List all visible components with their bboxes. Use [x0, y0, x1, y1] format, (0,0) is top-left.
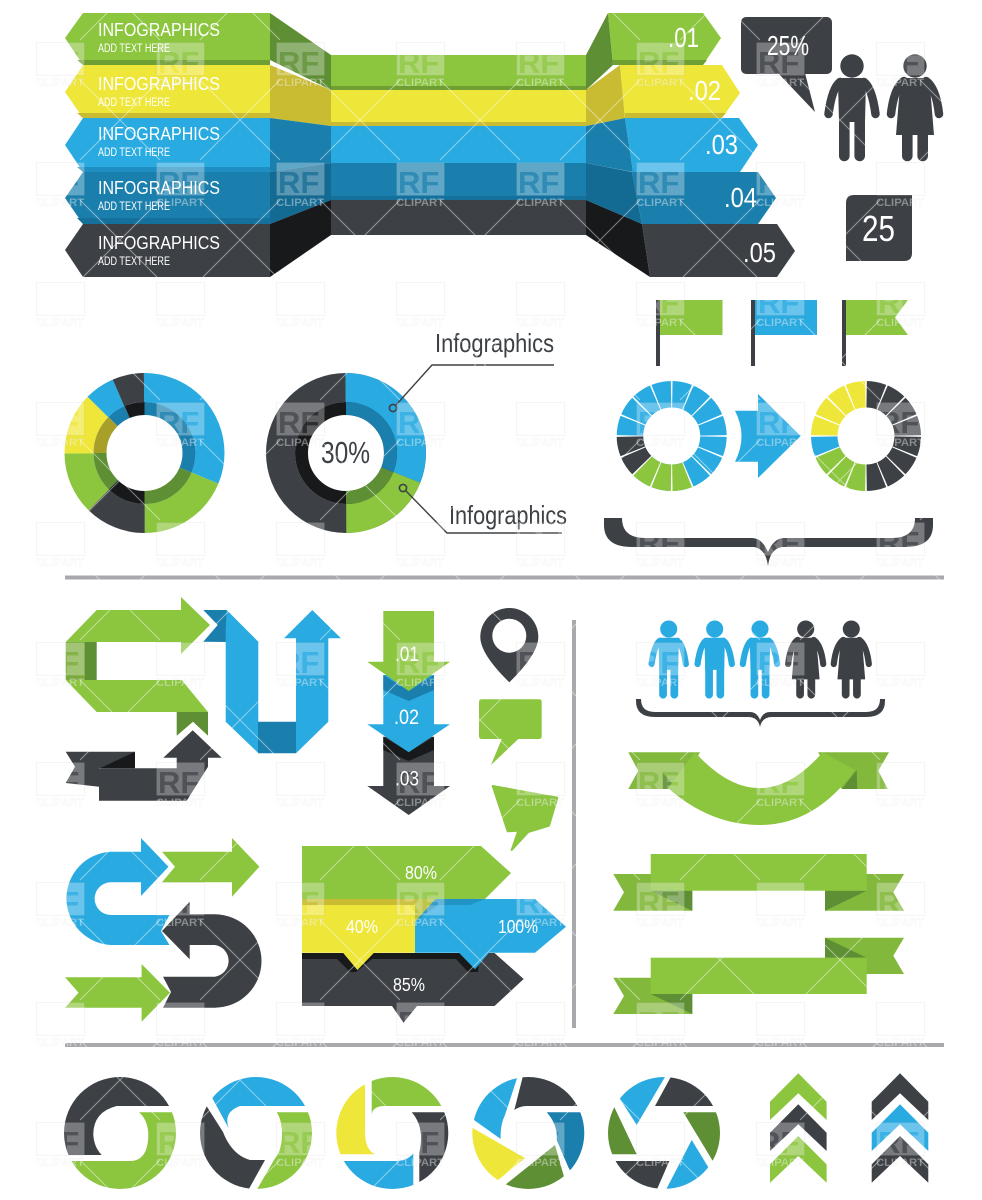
- divider: lower section rule: [65, 1043, 944, 1047]
- arrow: green folded S ribbon: [66, 597, 210, 736]
- watermark overlay: RF: [518, 1125, 559, 1160]
- band labels: INFOGRAPHICS: [98, 177, 220, 198]
- watermark overlay: RF: [758, 885, 799, 920]
- watermark overlay: CLIPART: [276, 197, 324, 209]
- watermark overlay: CLIPART: [876, 1157, 924, 1169]
- watermark overlay: CLIPART: [396, 1037, 444, 1049]
- watermark overlay: RF: [278, 765, 319, 800]
- arrow: stacked downward arrows: .01: [395, 643, 419, 666]
- icon: flat ribbon: [613, 854, 904, 911]
- watermark overlay: CLIPART: [396, 1157, 444, 1169]
- icon: stepped ribbon: [613, 938, 904, 1014]
- watermark overlay: CLIPART: [516, 797, 564, 809]
- watermark overlay: RF: [758, 645, 799, 680]
- panel: folded five-band banner: [65, 13, 795, 277]
- watermark overlay: RF: [638, 1005, 679, 1040]
- watermark overlay: RF: [278, 1125, 319, 1160]
- chart: donut two 30%: 30%: [321, 435, 370, 470]
- band labels: [98, 19, 776, 268]
- icon: five-blade aperture: [472, 1077, 584, 1189]
- watermark overlay: CLIPART: [36, 1037, 84, 1049]
- chart: segmented ring two: [824, 394, 908, 478]
- watermark overlay: RF: [38, 285, 79, 320]
- right ends with folds: [586, 13, 795, 277]
- panel: five people with brace: [636, 620, 885, 727]
- watermark overlay: RF: [518, 765, 559, 800]
- watermark overlay: RF: [878, 405, 919, 440]
- watermark overlay: RF: [278, 645, 319, 680]
- watermark overlay: CLIPART: [876, 557, 924, 569]
- 40% yellow arrow: 40%: [346, 917, 378, 937]
- icon: large brace: [604, 518, 933, 566]
- band 3 blue left: [65, 118, 331, 172]
- watermark overlay: CLIPART: [276, 797, 324, 809]
- watermark overlay: CLIPART: [276, 437, 324, 449]
- band labels: .01: [668, 22, 699, 53]
- watermark overlay: RF: [158, 1005, 199, 1040]
- watermark overlay: RF: [278, 525, 319, 560]
- callout: 25% speech bubble: 25%: [767, 30, 809, 61]
- watermark overlay: CLIPART: [636, 557, 684, 569]
- icon: small brace: [636, 699, 885, 727]
- watermark overlay: CLIPART: [636, 317, 684, 329]
- 80% green arrow: 80%: [405, 863, 437, 883]
- watermark overlay: CLIPART: [276, 557, 324, 569]
- chart: segmented ring one: [630, 394, 713, 478]
- watermark overlay: CLIPART: [156, 317, 204, 329]
- watermark overlay: RF: [518, 45, 559, 80]
- watermark overlay: RF: [38, 405, 79, 440]
- watermark overlay: RF: [158, 885, 199, 920]
- icon: three-piece ring: [200, 1077, 312, 1189]
- watermark overlay: RF: [758, 285, 799, 320]
- watermark overlay: RF: [158, 645, 199, 680]
- watermark overlay: RF: [878, 45, 919, 80]
- watermark overlay: CLIPART: [636, 917, 684, 929]
- watermark overlay: RF: [518, 165, 559, 200]
- watermark overlay: CLIPART: [396, 317, 444, 329]
- watermark overlay: RF: [158, 405, 199, 440]
- band labels: INFOGRAPHICS: [98, 73, 220, 94]
- watermark overlay: CLIPART: [36, 917, 84, 929]
- icon: green speech bubble: [479, 699, 542, 765]
- icon: dark and blue chevrons: [872, 1073, 928, 1183]
- arrow: blue block arrow between rings: [735, 394, 801, 478]
- arrow: blue U-turn arrow: [66, 838, 170, 945]
- 40% yellow arrow: [302, 899, 415, 970]
- watermark overlay: RF: [38, 165, 79, 200]
- watermark overlay: CLIPART: [516, 917, 564, 929]
- icon: green flag: [656, 300, 722, 366]
- divider: vertical rule: [572, 620, 576, 1028]
- arrow: blue folded U ribbon: [203, 610, 341, 753]
- watermark overlay: RF: [158, 525, 199, 560]
- watermark overlay: RF: [398, 45, 439, 80]
- icon: woman dark 2: [834, 620, 869, 695]
- watermark overlay: CLIPART: [876, 437, 924, 449]
- band labels: ADD TEXT HERE: [98, 256, 170, 268]
- watermark overlay: RF: [278, 285, 319, 320]
- watermark overlay: RF: [638, 45, 679, 80]
- watermark overlay: CLIPART: [756, 197, 804, 209]
- watermark overlay: RF: [878, 1005, 919, 1040]
- watermark overlay: CLIPART: [396, 77, 444, 89]
- callout: 25% speech bubble: [741, 17, 832, 112]
- icon: blue flag: [751, 300, 817, 366]
- watermark overlay: RF: [398, 885, 439, 920]
- watermark overlay: CLIPART: [276, 917, 324, 929]
- watermark overlay: RF: [878, 885, 919, 920]
- watermark overlay: RF: [518, 1005, 559, 1040]
- watermark overlay: RF: [758, 765, 799, 800]
- band labels: INFOGRAPHICS: [98, 123, 220, 144]
- watermark overlay: CLIPART: [516, 1157, 564, 1169]
- 85% dark arrow: [302, 953, 524, 1023]
- watermark overlay: CLIPART: [516, 437, 564, 449]
- watermark overlay: CLIPART: [636, 197, 684, 209]
- watermark overlay: CLIPART: [156, 77, 204, 89]
- watermark overlay: RF: [878, 525, 919, 560]
- watermark overlay: RF: [38, 1125, 79, 1160]
- watermark overlay: RF: [398, 1005, 439, 1040]
- arrow: stacked downward arrows: [367, 611, 450, 815]
- band labels: .05: [743, 237, 776, 268]
- watermark overlay: CLIPART: [876, 917, 924, 929]
- watermark overlay: RF: [638, 645, 679, 680]
- watermark overlay: CLIPART: [756, 1157, 804, 1169]
- 85% dark arrow: 85%: [393, 975, 425, 995]
- band labels: INFOGRAPHICS: [98, 19, 220, 40]
- watermark overlay: RF: [758, 165, 799, 200]
- watermark overlay: RF: [638, 285, 679, 320]
- watermark overlay: CLIPART: [756, 677, 804, 689]
- watermark overlay: CLIPART: [636, 677, 684, 689]
- watermark overlay: CLIPART: [36, 1157, 84, 1169]
- watermark overlay: RF: [38, 45, 79, 80]
- watermark overlay: CLIPART: [516, 77, 564, 89]
- band labels: ADD TEXT HERE: [98, 97, 170, 109]
- band labels: ADD TEXT HERE: [98, 201, 170, 213]
- watermark overlay: CLIPART: [276, 77, 324, 89]
- watermark overlay: RF: [398, 285, 439, 320]
- watermark overlay: CLIPART: [156, 1157, 204, 1169]
- 100% blue arrow: 100%: [498, 917, 538, 937]
- watermark overlay: RF: [278, 885, 319, 920]
- watermark overlay: RF: [518, 885, 559, 920]
- watermark overlay: CLIPART: [756, 77, 804, 89]
- watermark overlay: RF: [278, 45, 319, 80]
- band labels: INFOGRAPHICS: [98, 232, 220, 253]
- callout: top Infographics label: Infographics: [435, 328, 554, 358]
- watermark overlay: CLIPART: [276, 1157, 324, 1169]
- watermark overlay: CLIPART: [36, 77, 84, 89]
- watermark overlay: RF: [878, 165, 919, 200]
- band labels: .02: [688, 75, 721, 106]
- watermark overlay: CLIPART: [396, 437, 444, 449]
- icon: four-piece ring: [336, 1077, 448, 1189]
- watermark overlay: RF: [638, 765, 679, 800]
- watermark overlay: CLIPART: [876, 77, 924, 89]
- watermark overlay: CLIPART: [876, 317, 924, 329]
- icon: green and dark chevrons: [770, 1073, 827, 1183]
- chart: percent arrows: [302, 846, 566, 1023]
- watermark overlay: CLIPART: [156, 677, 204, 689]
- watermark overlay: CLIPART: [36, 437, 84, 449]
- watermark overlay: RF: [398, 765, 439, 800]
- watermark overlay: RF: [158, 45, 199, 80]
- watermark overlay: RF: [278, 405, 319, 440]
- callout: top Infographics label: [389, 328, 554, 412]
- icon: man: [828, 54, 876, 156]
- watermark overlay: RF: [638, 405, 679, 440]
- watermark overlay: RF: [758, 1005, 799, 1040]
- watermark overlay: RF: [38, 1005, 79, 1040]
- callout: 25 square badge: [846, 195, 912, 261]
- watermark overlay: CLIPART: [876, 1037, 924, 1049]
- icon: six-blade aperture: [608, 1077, 720, 1189]
- watermark overlay: CLIPART: [276, 317, 324, 329]
- chart: donut two 30%: [280, 388, 412, 518]
- watermark overlay: RF: [278, 165, 319, 200]
- watermark overlay: RF: [158, 765, 199, 800]
- icon: person blue 1: [652, 620, 686, 695]
- watermark overlay: CLIPART: [36, 317, 84, 329]
- band labels: ADD TEXT HERE: [98, 147, 170, 159]
- watermark overlay: CLIPART: [636, 437, 684, 449]
- watermark overlay: RF: [638, 885, 679, 920]
- watermark overlay: CLIPART: [156, 797, 204, 809]
- watermark overlay: RF: [158, 285, 199, 320]
- icon: two-piece ring: [64, 1077, 176, 1189]
- watermark overlay: CLIPART: [156, 1037, 204, 1049]
- watermark overlay: RF: [278, 1005, 319, 1040]
- watermark overlay: CLIPART: [756, 557, 804, 569]
- watermark overlay: RF: [518, 645, 559, 680]
- watermark overlay: CLIPART: [36, 557, 84, 569]
- watermark overlay: CLIPART: [276, 1037, 324, 1049]
- watermark overlay: CLIPART: [396, 197, 444, 209]
- watermark overlay: RF: [38, 885, 79, 920]
- watermark overlay: RF: [758, 1125, 799, 1160]
- arrow: green arrow bottom: [65, 964, 170, 1022]
- icon: woman dark 1: [788, 620, 823, 695]
- watermark overlay: RF: [878, 1125, 919, 1160]
- watermark overlay: CLIPART: [636, 797, 684, 809]
- band labels: .03: [705, 129, 738, 160]
- arrow: stacked downward arrows: .03: [395, 768, 419, 790]
- band 4 dark blue left: [65, 163, 331, 224]
- watermark overlay: CLIPART: [636, 77, 684, 89]
- callout: lower Infographics label: Infographics: [449, 500, 567, 530]
- watermark overlay: RF: [758, 45, 799, 80]
- icon: notched green flag: [842, 300, 908, 366]
- band labels: ADD TEXT HERE: [98, 43, 170, 55]
- watermark overlay: CLIPART: [876, 197, 924, 209]
- watermark overlay: RF: [398, 405, 439, 440]
- watermark overlay: RF: [398, 1125, 439, 1160]
- centre bands: [331, 55, 586, 235]
- band 5 dark left: [65, 200, 331, 277]
- 80% green arrow: [302, 846, 511, 923]
- icon: person blue 2: [698, 620, 732, 695]
- arrow: stacked downward arrows: .02: [394, 706, 419, 729]
- arrow: dark folded ribbon: [66, 730, 222, 801]
- watermark overlay: CLIPART: [396, 677, 444, 689]
- watermark overlay: CLIPART: [156, 437, 204, 449]
- icon: map pin: [480, 608, 538, 682]
- watermark overlay: CLIPART: [396, 917, 444, 929]
- watermark overlay: RF: [518, 525, 559, 560]
- watermark overlay: RF: [38, 525, 79, 560]
- watermark overlay: RF: [398, 525, 439, 560]
- watermark overlay: CLIPART: [876, 797, 924, 809]
- watermark overlay: RF: [158, 165, 199, 200]
- watermark overlay: RF: [638, 1125, 679, 1160]
- watermark overlay: RF: [878, 765, 919, 800]
- chart: donut one: [79, 388, 210, 518]
- band 2 yellow left: [65, 65, 331, 126]
- watermark overlay: CLIPART: [156, 197, 204, 209]
- watermark overlay: RF: [878, 645, 919, 680]
- watermark overlay: RF: [518, 405, 559, 440]
- watermark overlay: RF: [518, 285, 559, 320]
- watermark overlay: CLIPART: [516, 1037, 564, 1049]
- watermark overlay: RF: [158, 1125, 199, 1160]
- watermark overlay: RF: [38, 765, 79, 800]
- arrow: green arrow top: [162, 838, 259, 897]
- icon: tilted green speech bubble: [493, 786, 557, 850]
- band labels: .04: [724, 182, 757, 213]
- callout: 25 square badge: 25: [862, 208, 895, 249]
- icon: woman: [891, 54, 939, 156]
- watermark overlay: RF: [638, 165, 679, 200]
- watermark overlay: CLIPART: [756, 797, 804, 809]
- watermark overlay: CLIPART: [396, 557, 444, 569]
- watermark overlay: CLIPART: [636, 1157, 684, 1169]
- arrow: dark U-turn arrow: [162, 902, 262, 1008]
- watermark overlay: CLIPART: [516, 197, 564, 209]
- watermark overlay: RF: [758, 405, 799, 440]
- icon: person blue 3: [743, 620, 777, 695]
- watermark overlay: CLIPART: [516, 317, 564, 329]
- watermark overlay: RF: [878, 285, 919, 320]
- watermark overlay: CLIPART: [876, 677, 924, 689]
- watermark overlay: RF: [398, 645, 439, 680]
- watermark overlay: CLIPART: [156, 917, 204, 929]
- watermark overlay: CLIPART: [756, 917, 804, 929]
- watermark overlay: CLIPART: [636, 1037, 684, 1049]
- watermark overlay: CLIPART: [36, 197, 84, 209]
- watermark overlay: RF: [38, 645, 79, 680]
- watermark overlay: CLIPART: [756, 1037, 804, 1049]
- watermark overlay: CLIPART: [36, 677, 84, 689]
- divider: upper section rule: [65, 576, 944, 580]
- watermark overlay: CLIPART: [756, 317, 804, 329]
- 100% blue arrow: [415, 899, 566, 969]
- watermark overlay: CLIPART: [516, 557, 564, 569]
- watermark overlay: CLIPART: [156, 557, 204, 569]
- watermark overlay: CLIPART: [756, 437, 804, 449]
- watermark overlay: RF: [638, 525, 679, 560]
- watermark overlay: CLIPART: [36, 797, 84, 809]
- callout: lower Infographics label: [399, 484, 567, 533]
- band 1 green left: [65, 13, 331, 90]
- watermark overlay: CLIPART: [276, 677, 324, 689]
- watermark overlay: CLIPART: [396, 797, 444, 809]
- watermark overlay: RF: [758, 525, 799, 560]
- watermark overlay: CLIPART: [516, 677, 564, 689]
- watermark overlay: RF: [398, 165, 439, 200]
- icon: curved ribbon: [628, 752, 889, 825]
